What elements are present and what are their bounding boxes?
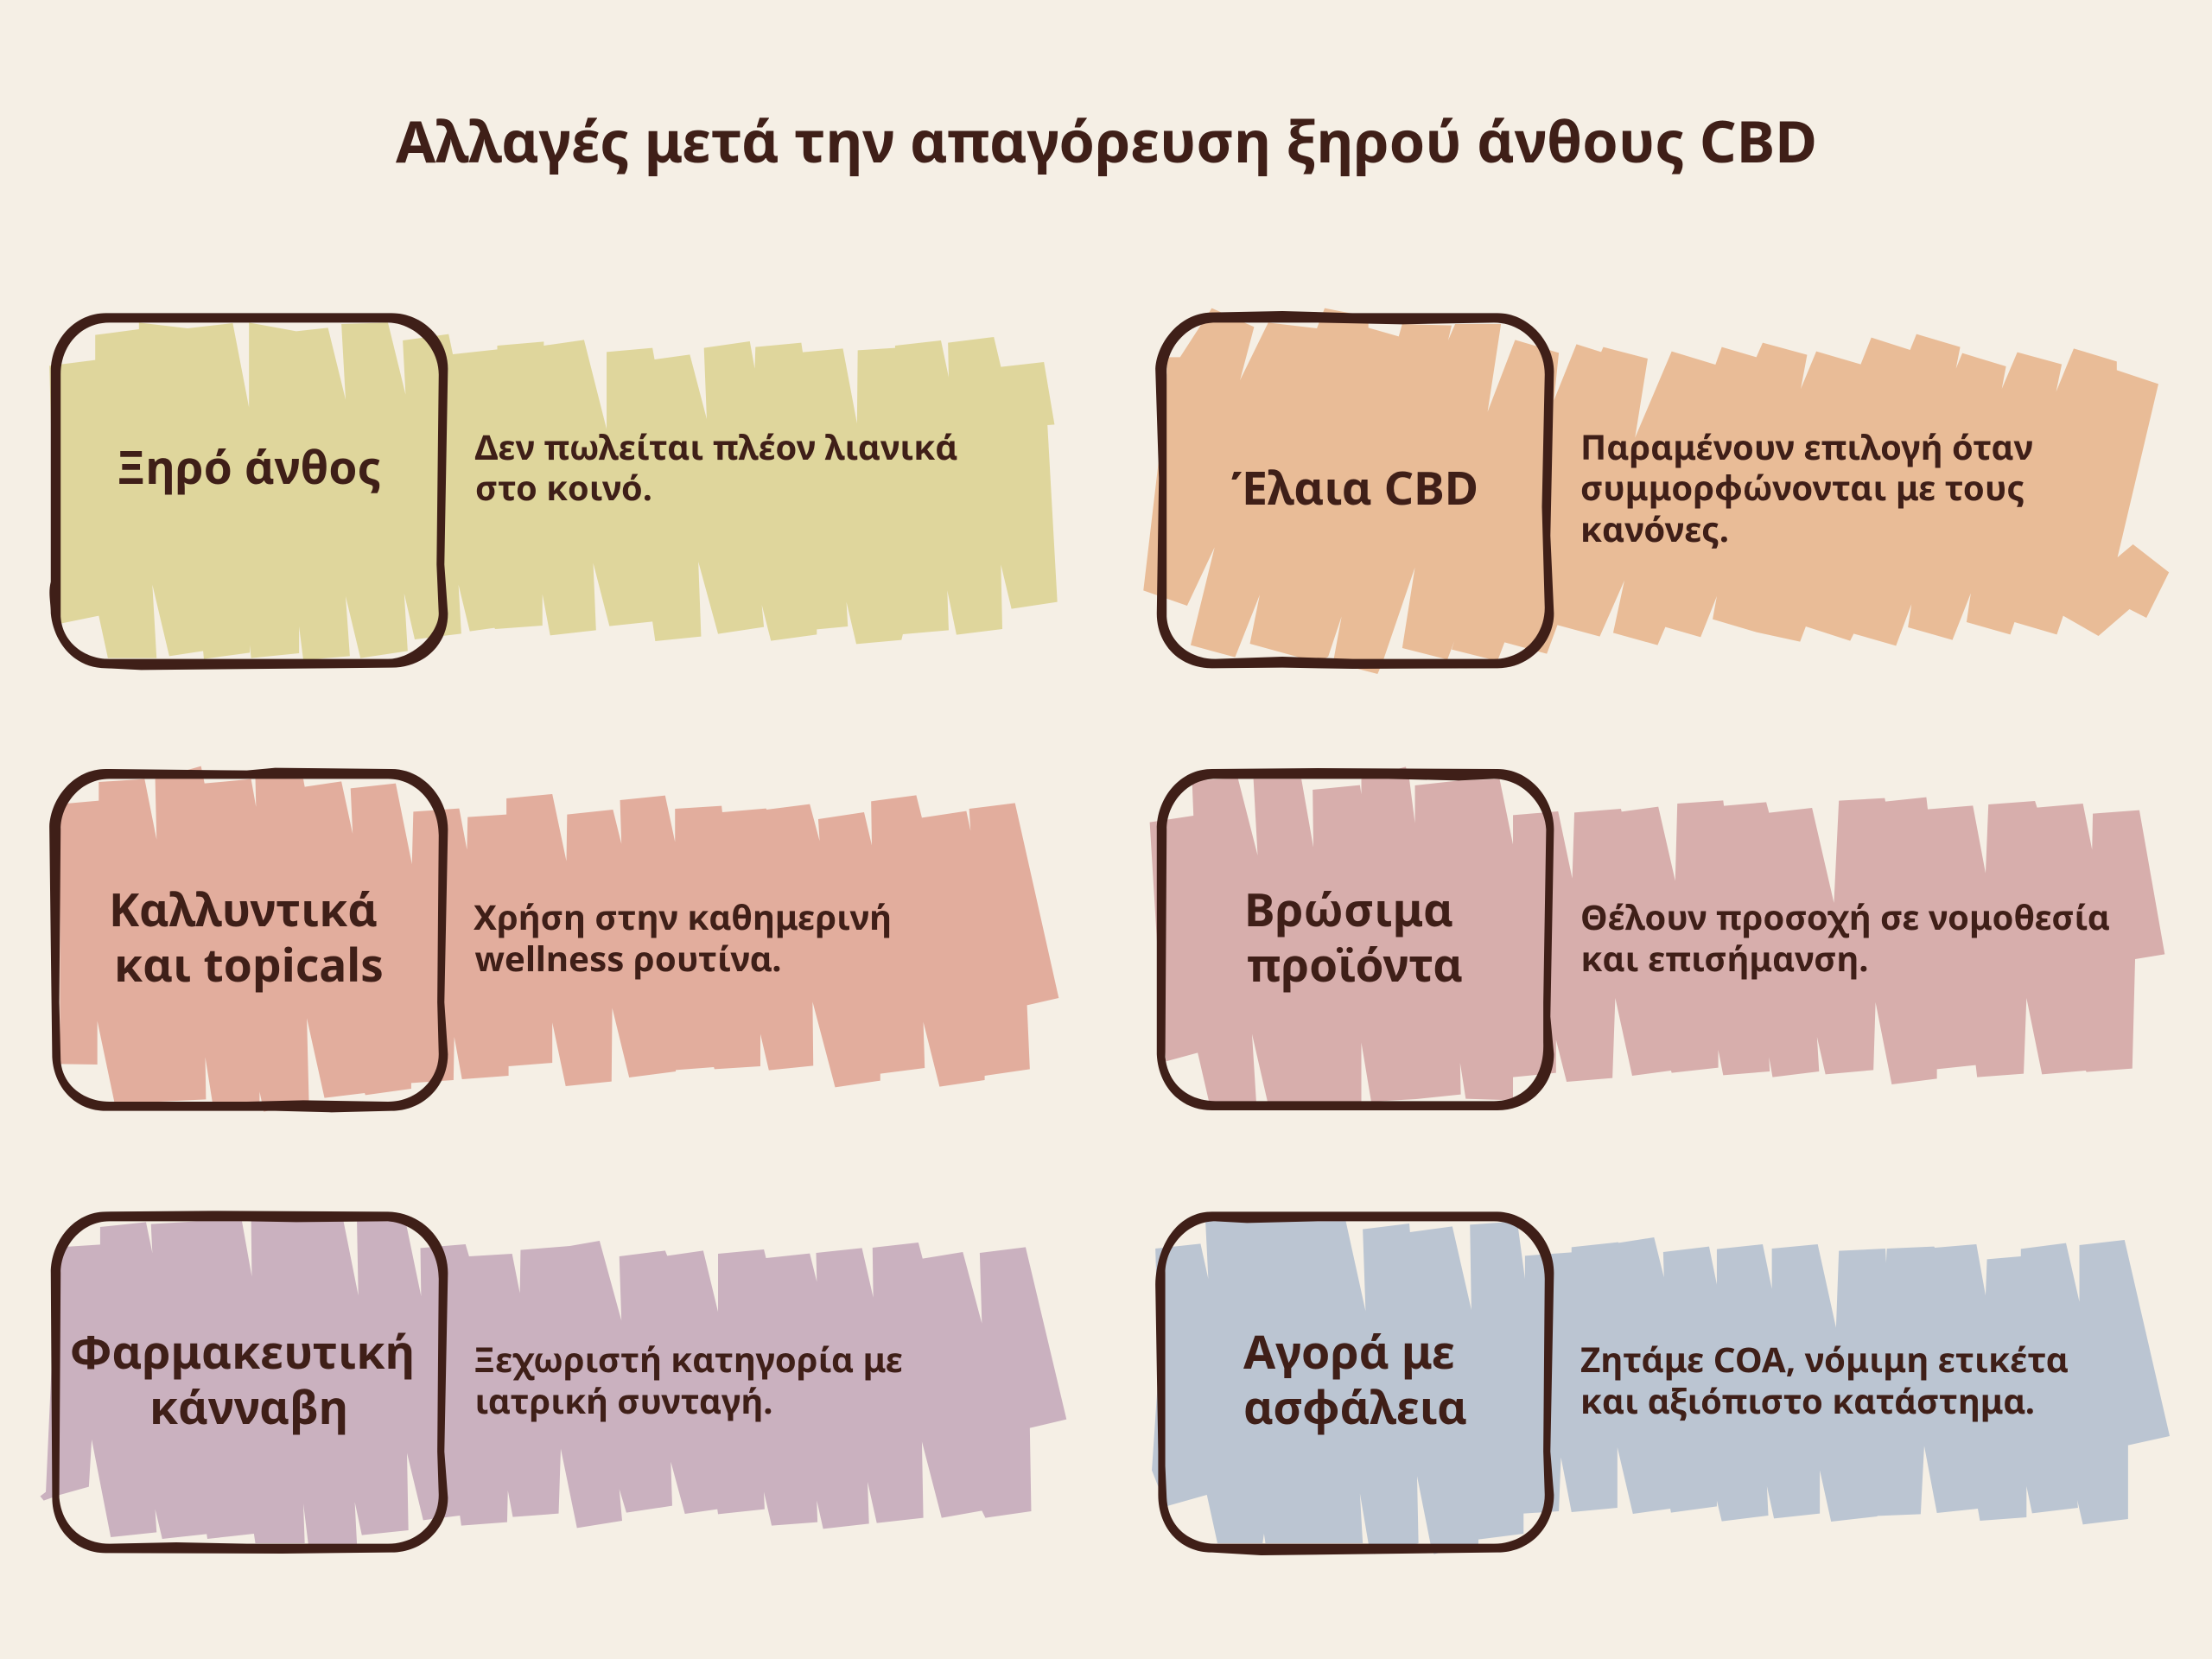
scribble fill: dried flower (49, 322, 1058, 660)
heading: pharmaceutical cannabis: κάνναβη (149, 1375, 348, 1438)
scribble fill: safe buying (1152, 1221, 2170, 1554)
description: pharmaceutical cannabis: Ξεχωριστή κατηγορία με (474, 1337, 903, 1382)
panel: edibles (1150, 766, 2164, 1110)
description: edibles (1580, 894, 2110, 982)
panel: safe buying (1152, 1211, 2170, 1555)
description: dried flower: στο κοινό. (475, 465, 652, 511)
description: CBD oils: κανόνες. (1580, 506, 1729, 552)
description: edibles: Θέλουν προσοχή σε νομοθεσία (1580, 894, 2110, 940)
description: cosmetics and topicals: Χρήση στην καθημερινή (474, 894, 892, 940)
frame: safe buying (1155, 1211, 1554, 1555)
heading: cosmetics and topicals: και topicals (114, 932, 384, 995)
heading: safe buying (1243, 1319, 1467, 1438)
title: Αλλαγές μετά την απαγόρευση ξηρού άνθους CBD (396, 102, 1817, 180)
heading: pharmaceutical cannabis (70, 1319, 415, 1438)
scribble fill: CBD oils (1143, 308, 2169, 674)
scribble fill: cosmetics and topicals (60, 766, 1058, 1112)
heading: safe buying: ασφάλεια (1243, 1375, 1467, 1438)
frame: cosmetics and topicals (49, 768, 448, 1112)
description: dried flower: Δεν πωλείται πλέον λιανικά (475, 424, 957, 470)
heading: cosmetics and topicals (109, 877, 384, 995)
description: pharmaceutical cannabis: ιατρική συνταγή. (475, 1378, 772, 1424)
frame: edibles (1157, 768, 1554, 1110)
heading: edibles (1244, 877, 1463, 995)
panel: pharmaceutical cannabis (41, 1211, 1066, 1554)
heading: dried flower: Ξηρό άνθος (117, 435, 381, 498)
description: safe buying (1580, 1337, 2069, 1424)
description: CBD oils (1580, 424, 2033, 552)
description: safe buying: Ζητάμε COA, νόμιμη ετικέτα (1580, 1337, 2069, 1382)
description: pharmaceutical cannabis (474, 1337, 903, 1424)
heading: pharmaceutical cannabis: Φαρμακευτική (70, 1319, 415, 1382)
panel: CBD oils (1143, 308, 2169, 674)
panel: cosmetics and topicals (49, 766, 1058, 1112)
description: CBD oils: Παραμένουν επιλογή όταν (1580, 424, 2033, 470)
description: cosmetics and topicals: wellness ρουτίνα. (475, 936, 781, 982)
description: edibles: και επισήμανση. (1581, 936, 1868, 982)
description: CBD oils: συμμορφώνονται με τους (1580, 465, 2024, 511)
heading: safe buying: Αγορά με (1243, 1319, 1455, 1382)
heading: CBD oils: Έλαια CBD (1231, 455, 1478, 518)
frame: CBD oils (1155, 311, 1554, 669)
panel: dried flower (49, 313, 1058, 670)
heading: edibles: προϊόντα (1247, 932, 1463, 995)
frame: pharmaceutical cannabis (51, 1211, 448, 1554)
frame: dried flower (49, 313, 448, 670)
heading: cosmetics and topicals: Καλλυντικά (109, 877, 378, 940)
scribble fill: pharmaceutical cannabis (41, 1221, 1066, 1544)
description: dried flower (475, 424, 957, 511)
description: safe buying: και αξιόπιστο κατάστημα. (1580, 1378, 2035, 1424)
description: cosmetics and topicals (474, 894, 892, 982)
scribble fill: edibles (1150, 766, 2164, 1102)
heading: edibles: Βρώσιμα (1244, 877, 1453, 940)
